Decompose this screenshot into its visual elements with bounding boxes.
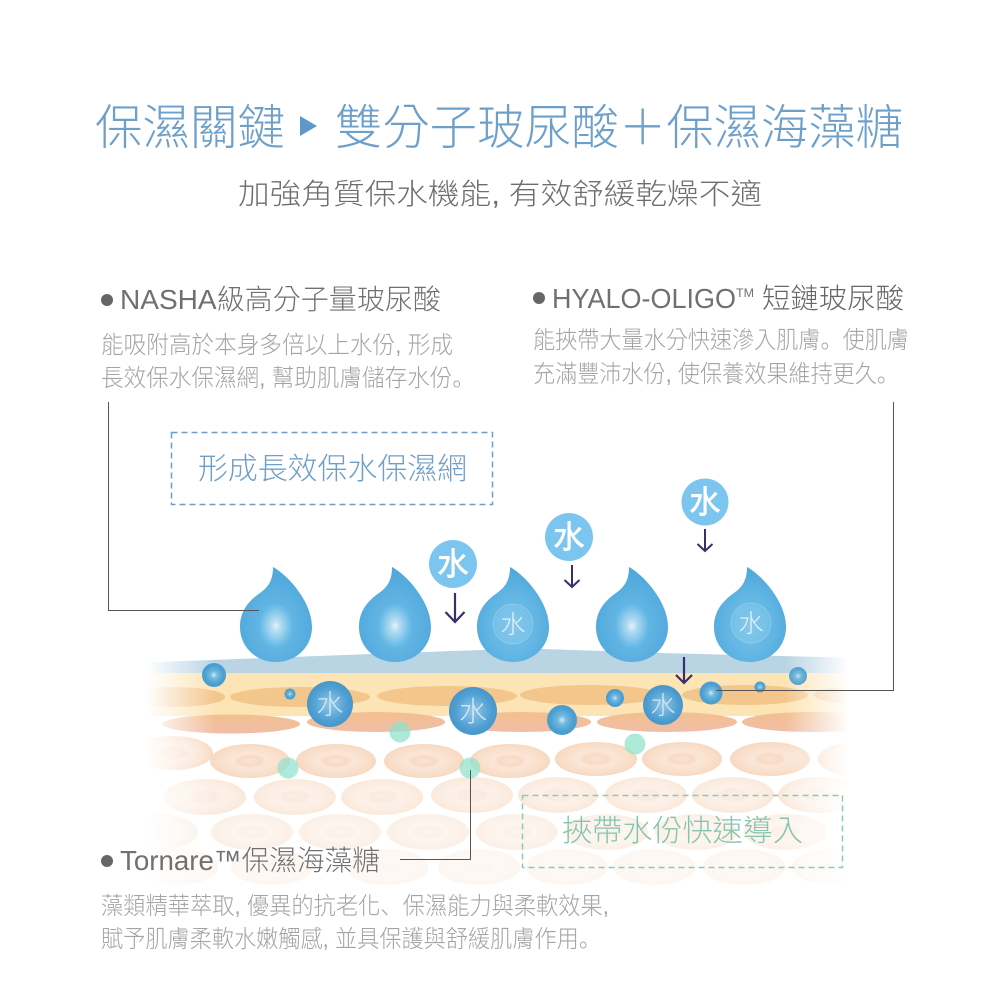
droplet 3 with water mark: 水 bbox=[500, 611, 526, 639]
droplet 4 bbox=[596, 567, 668, 662]
panel: NASHA description: 長效保水保濕網, 幫助肌膚儲存水份。 bbox=[101, 358, 475, 393]
callout: carries water quickly: 挾帶水份快速導入 bbox=[562, 815, 803, 848]
mint particles bbox=[278, 722, 646, 778]
panel: Tornare description bbox=[101, 845, 609, 954]
water circles: 水 bbox=[553, 519, 585, 555]
blue surface band bbox=[130, 649, 860, 673]
bubbles: 水 bbox=[459, 696, 487, 727]
water circles bbox=[429, 478, 728, 588]
callout: carries water quickly bbox=[522, 796, 842, 868]
panel: NASHA description: NASHA級高分子量玻尿酸 bbox=[120, 284, 441, 315]
bubbles: 水 bbox=[650, 692, 676, 720]
droplet 5 with water mark: 水 bbox=[738, 610, 764, 638]
right fade bbox=[785, 640, 849, 890]
panel: HYALO-OLIGO description: HYALO-OLIGO bbox=[552, 283, 736, 314]
droplet 1 bbox=[240, 567, 312, 662]
title: 雙分子玻尿酸＋保濕海藻糖 bbox=[335, 102, 903, 155]
panel: HYALO-OLIGO description: 充滿豐沛水份, 使保養效果維持更久。 bbox=[533, 354, 899, 389]
bubbles bbox=[202, 663, 807, 735]
water droplets bbox=[240, 567, 786, 662]
water circles: 水 bbox=[689, 484, 721, 520]
panel: Tornare description: 藻類精華萃取, 優異的抗老化、保濕能力與柔軟效果, bbox=[101, 886, 609, 921]
stratum band yellow bbox=[130, 673, 860, 716]
skin layers illustration bbox=[100, 640, 908, 890]
panel: Tornare description: 賦予肌膚柔軟水嫩觸感, 並具保護與舒緩肌膚作用。 bbox=[101, 919, 601, 954]
pink ellipses bbox=[162, 712, 882, 734]
water circles: 水 bbox=[437, 546, 469, 582]
cell rows bbox=[118, 736, 898, 885]
left fade bbox=[146, 640, 216, 890]
panel: Tornare description: Tornare™保濕海藻糖 bbox=[120, 845, 380, 876]
droplet 2 bbox=[359, 567, 431, 662]
panel: HYALO-OLIGO description: 短鏈玻尿酸 bbox=[762, 283, 904, 314]
panel: HYALO-OLIGO description: TM bbox=[736, 286, 754, 300]
panel: NASHA description: 能吸附高於本身多倍以上水份, 形成 bbox=[101, 332, 453, 359]
panel: HYALO-OLIGO description: 能挾帶大量水分快速滲入肌膚。使肌膚 bbox=[533, 320, 909, 355]
orange ellipses bbox=[121, 685, 906, 707]
title bbox=[95, 102, 903, 155]
leader lines bbox=[108, 402, 894, 860]
droplet 3 with water mark bbox=[477, 567, 549, 662]
arrows bbox=[446, 529, 712, 683]
bubbles: 水 bbox=[316, 690, 344, 720]
subtitle: 加強角質保水機能, 有效舒緩乾燥不適 bbox=[238, 178, 762, 211]
callout: long-lasting moisture net bbox=[172, 432, 492, 504]
panel: HYALO-OLIGO description bbox=[533, 283, 909, 389]
title: 保濕關鍵 bbox=[95, 102, 285, 155]
callout: long-lasting moisture net: 形成長效保水保濕網 bbox=[198, 453, 467, 486]
panel: NASHA description bbox=[101, 284, 475, 393]
droplet 5 with water mark bbox=[714, 567, 786, 662]
